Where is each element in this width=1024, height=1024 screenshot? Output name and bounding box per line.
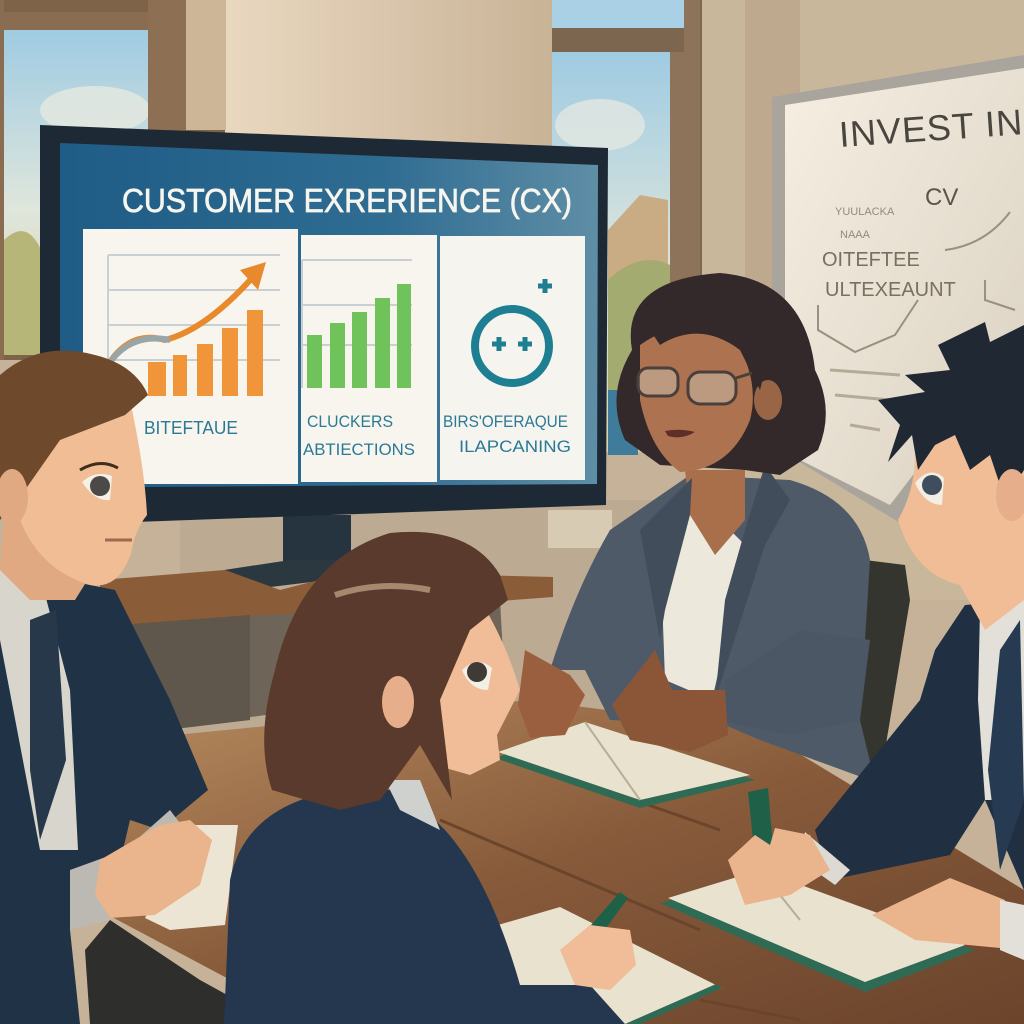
notebook: left bbox=[145, 825, 238, 930]
person: center girl bbox=[224, 532, 636, 1024]
whiteboard: CV bbox=[925, 184, 958, 211]
back desk bbox=[100, 570, 553, 735]
person: woman with glasses bbox=[550, 273, 875, 782]
chart panel: circle icon bbox=[440, 236, 585, 480]
chart panel: orange bars: BITEFTAUE bbox=[144, 418, 238, 438]
chart panel: circle icon: ILAPCANING bbox=[459, 437, 571, 456]
screen title: CUSTOMER EXRERIENCE (CX) bbox=[122, 182, 572, 219]
whiteboard: YUULACKA bbox=[835, 206, 895, 218]
person: right boy bbox=[728, 322, 1024, 960]
table bbox=[80, 700, 1024, 1024]
chair: foreground bbox=[85, 920, 280, 1024]
person: left boy bbox=[0, 350, 212, 1024]
whiteboard: OITEFTEE bbox=[822, 249, 920, 271]
monitor bbox=[40, 125, 608, 588]
chart panel: circle icon: BIRS'OFERAQUE bbox=[443, 412, 568, 431]
middle window bbox=[552, 0, 702, 455]
whiteboard: ULTEXEAUNT bbox=[825, 279, 956, 301]
chart panel: green bars bbox=[301, 235, 437, 482]
notebook: bottom bbox=[498, 907, 722, 1024]
notebook: center bbox=[495, 722, 755, 808]
left window bbox=[0, 0, 226, 360]
notebook: right bbox=[660, 870, 975, 992]
woman hands bbox=[518, 650, 728, 752]
chair: back right bbox=[850, 560, 910, 780]
whiteboard bbox=[772, 55, 1024, 526]
chart panel: green bars: CLUCKERS bbox=[307, 412, 393, 431]
whiteboard: INVEST IN bbox=[838, 101, 1024, 155]
chart panel: orange bars bbox=[83, 229, 298, 484]
whiteboard: NAAA bbox=[840, 229, 871, 241]
chart panel: green bars: ABTIECTIONS bbox=[303, 440, 415, 459]
